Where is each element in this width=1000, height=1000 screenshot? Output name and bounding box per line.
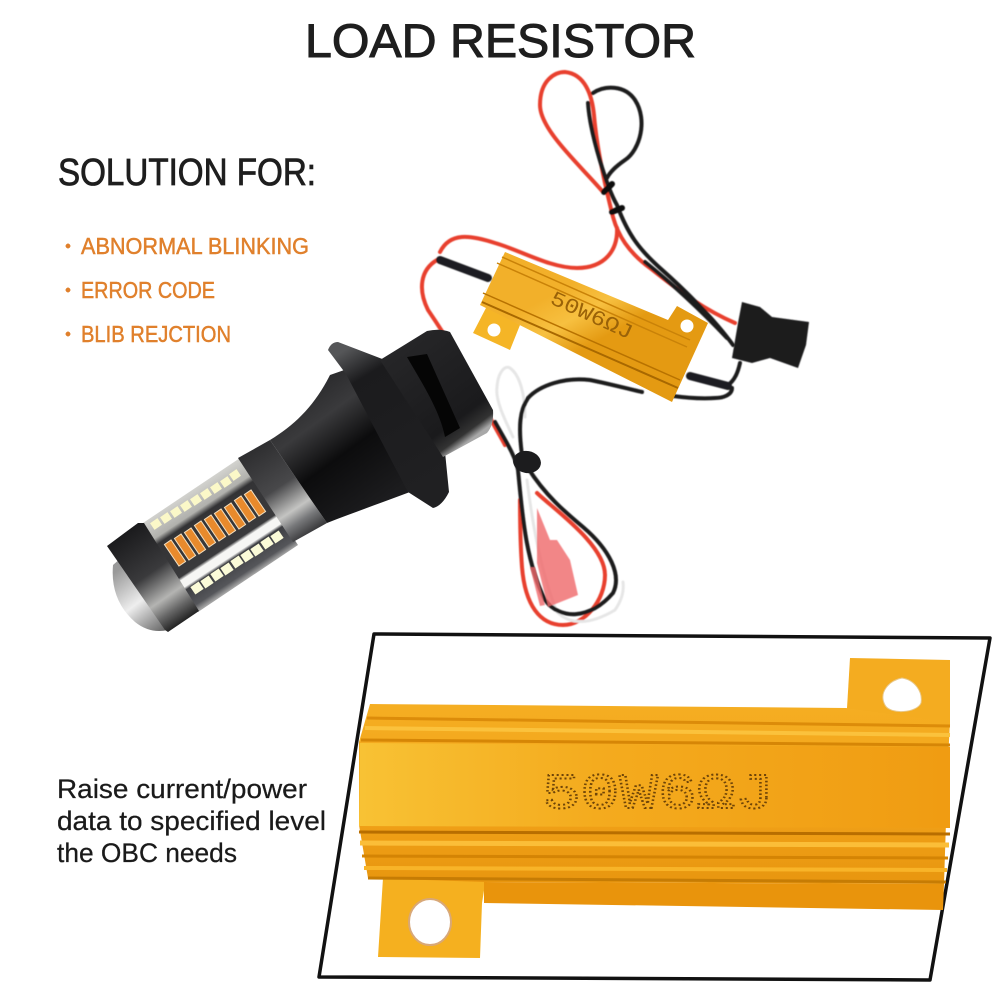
cable ties — [604, 184, 622, 212]
top ridges — [361, 718, 950, 745]
amber LED row — [164, 490, 266, 566]
LED bulb — [107, 330, 493, 632]
description text: data to specified level — [57, 806, 326, 836]
bulb flange — [328, 342, 449, 508]
white wire — [497, 367, 623, 622]
bulb LED section — [143, 458, 298, 612]
description text — [57, 774, 326, 868]
list: solutions — [66, 233, 309, 347]
resistor marking: 50W6ΩJ — [542, 767, 774, 824]
lower ridges — [359, 832, 950, 882]
list item: bulb rejection: BLIB REJCTION — [81, 321, 231, 347]
bottom band — [484, 882, 944, 910]
red wires — [422, 72, 735, 625]
resistor mounting tab — [473, 306, 520, 350]
list item: abnormal blinking: ABNORMAL BLINKING — [81, 233, 309, 259]
bulb cone — [270, 368, 420, 523]
upper mounting tab — [846, 658, 950, 725]
white LED row bottom — [190, 530, 284, 595]
bulb silver collar — [238, 440, 327, 542]
wiring harness — [422, 72, 740, 625]
small load resistor — [473, 252, 708, 402]
description text: the OBC needs — [57, 838, 237, 868]
lower mounting tab — [378, 878, 486, 958]
panel frame — [319, 634, 990, 980]
bulb head — [380, 330, 493, 457]
resistor body — [359, 704, 950, 884]
bulb lens — [113, 550, 170, 631]
panel: resistor close-up — [319, 634, 990, 980]
resistor marking: 50W6ΩJ — [546, 288, 636, 346]
white LED row top — [150, 469, 241, 530]
list item: error code: ERROR CODE — [81, 277, 215, 303]
description text: Raise current/power — [57, 774, 307, 804]
resistor body — [480, 252, 708, 402]
wire knot — [511, 449, 543, 475]
upper hole — [883, 678, 921, 712]
resistor holes — [488, 324, 500, 336]
heading: solution for: SOLUTION FOR: — [58, 152, 316, 194]
T20 connector — [732, 302, 809, 368]
lower hole — [409, 899, 451, 945]
bulb front ring — [107, 523, 199, 632]
resistor face — [359, 743, 950, 828]
title: LOAD RESISTOR — [305, 14, 696, 67]
heat shrink sleeves — [440, 260, 728, 386]
black wires — [495, 88, 740, 614]
fuse terminal — [530, 508, 578, 607]
